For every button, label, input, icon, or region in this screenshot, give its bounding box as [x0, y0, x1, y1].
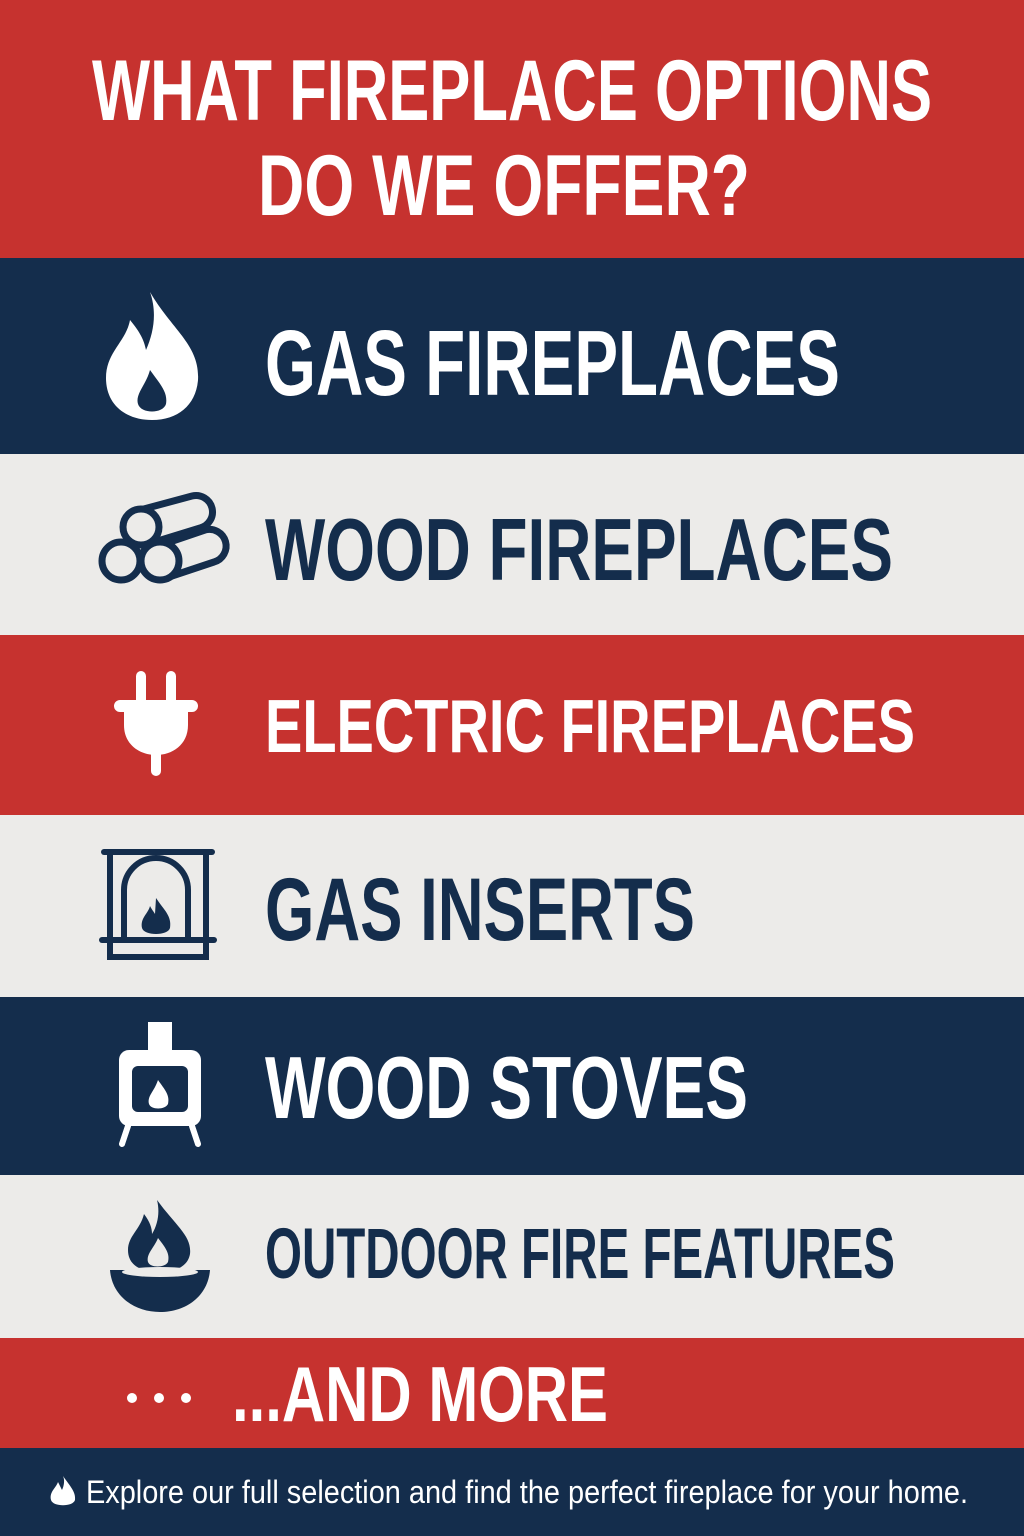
- heading: gas inserts: GAS INSERTS: [265, 859, 695, 959]
- heading: wood stoves: WOOD STOVES: [265, 1038, 748, 1137]
- title: DO WE OFFER?: [258, 138, 750, 234]
- icon: logs: [102, 496, 226, 580]
- icon: outdoor fire bowl: [110, 1200, 210, 1312]
- icon: gas flame: [106, 292, 198, 420]
- icon: dots: [127, 1393, 191, 1403]
- heading: and more: ...AND MORE: [232, 1350, 608, 1438]
- icon: plug: [114, 671, 198, 776]
- title: [92, 43, 932, 234]
- icon: gas insert: [102, 852, 214, 957]
- icon: wood stove: [119, 1022, 201, 1144]
